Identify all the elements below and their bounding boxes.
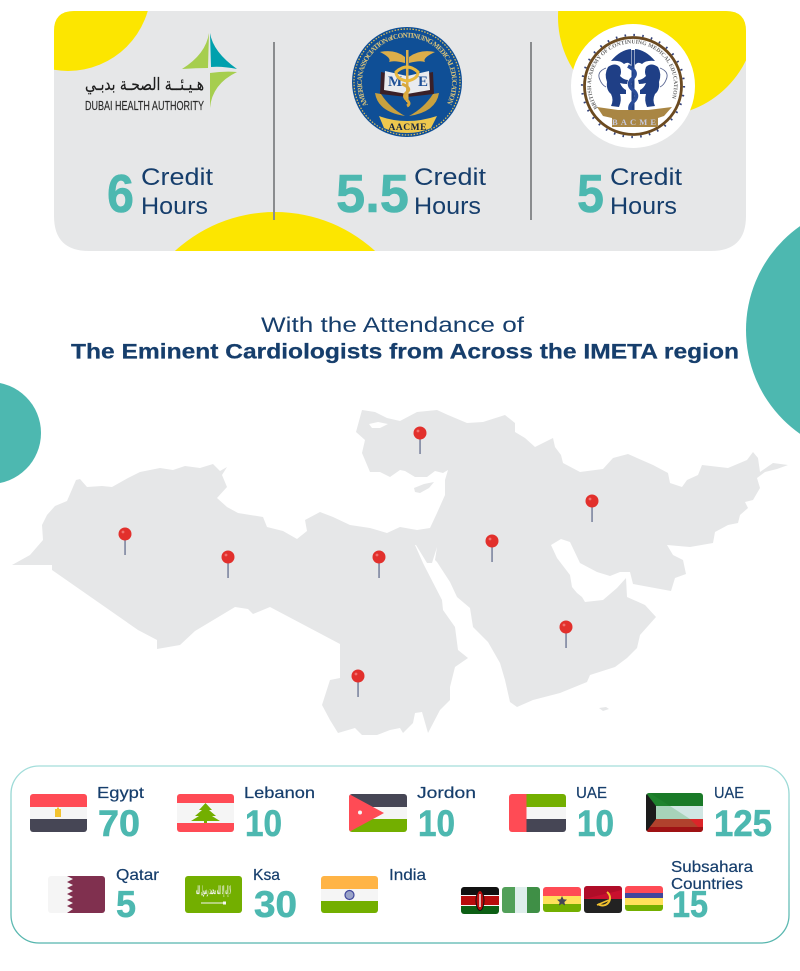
entry: KSA [185,867,297,925]
laurel [375,93,405,116]
heading: The Eminent Cardiologists from Across the IMETA region [71,340,739,364]
entry: Jordan: 10 [418,803,455,844]
caduceus [406,50,408,102]
map pin: South Arabia [560,620,572,648]
flag: UAE [509,794,566,832]
book [380,72,434,97]
entry: Subsahara Countries [461,860,754,918]
flag: Lebanon [177,794,234,832]
island: Socotra [599,707,609,711]
logo: AACME seal: AACME [388,123,426,133]
yellow accent shapes [54,11,746,251]
entry: KSA: 30 [254,884,297,925]
flag: Nigeria [502,887,540,913]
entry: Lebanon [177,786,314,836]
entry: UAE: UAE [576,785,607,802]
entry: UAE (Kuwait flag): 125 [714,803,772,844]
right lion [638,64,660,107]
credit: 5 hours: Credit [610,164,682,191]
map pin: North Arabia [486,534,498,562]
heading: With the Attendance of [261,313,524,337]
entry: India: India [389,867,426,884]
logo: Dubai Health Authority: هـيـئــة الصحـة بدبـي [85,75,204,95]
island: Cyprus [414,482,434,493]
entry: India [321,867,426,913]
decorative teal circle right [746,203,800,457]
logo: AACME seal: AMERICAN ASSOCIATION of CONTINUING MEDICAL EDUCATION [357,32,457,106]
flag: Kuwait [646,793,703,832]
wings [380,51,435,63]
credit: 5 hours: 5 [577,164,604,224]
entry: Lebanon: Lebanon [244,785,315,802]
credit: 5.5 hours: 5.5 [336,164,409,224]
map pin: Libya/Tunisia [222,550,234,578]
map pin: Turkey [414,426,426,454]
map pin: Iran [586,494,598,522]
logo: BACME seal: BACME [612,117,656,127]
entry: KSA: Ksa [253,867,280,884]
entry: UAE [509,786,613,836]
entry: Qatar: 5 [116,884,136,925]
logo: BACME seal: BRITISH ACADEMY OF CONTINUING MEDICAL EDUCATION [587,40,678,110]
entry: UAE (Kuwait flag): UAE [714,785,744,802]
map pin: Egypt [372,550,386,578]
entry: Subsahara Countries: Countries [671,876,743,893]
Marmara sea [369,422,388,428]
entry: Jordan: Jordon [417,785,476,802]
logo: Dubai Health Authority [85,33,237,113]
logo: Dubai Health Authority: DUBAI HEALTH AUTHORITY [85,98,204,113]
entry: Qatar [48,868,159,918]
entry: Egypt: Egypt [97,785,145,802]
map pin: Morocco/Algeria [118,528,132,555]
staff and snakes [632,50,634,122]
entry: Qatar: Qatar [116,867,160,884]
lion tails [599,68,667,87]
entry: Lebanon: 10 [245,803,282,844]
divider left [273,42,275,220]
entry: Egypt [30,786,144,836]
credit: 6 hours [107,164,213,224]
left lion [606,64,628,107]
panel: credit hours [54,11,746,251]
credit: 5.5 hours: Credit [414,164,486,191]
panel: attendance by country [11,766,789,943]
entry: KSA: لا إله إلا الله محمد رسول الله [196,884,231,897]
panel background [54,11,746,251]
flag: Qatar [48,876,105,913]
entry: Egypt: 70 [98,803,140,844]
flag: Angola [584,886,622,913]
map pin: Sudan [352,670,364,697]
flag: Mauritius [625,886,663,911]
wings [611,49,655,65]
credit: 5.5 hours: Hours [414,193,481,220]
entry: Subsahara Countries: 15 [672,884,708,925]
flag: Ghana [543,887,581,912]
credit: 6 hours: Credit [141,164,213,191]
credit: 5.5 hours [336,164,486,224]
heading [71,313,739,364]
logo: AACME seal: M [388,74,402,90]
credit: 6 hours: 6 [107,164,134,224]
flag: Jordan [349,794,407,832]
logo: BACME seal [571,24,695,148]
ribbon [379,116,437,133]
logo: AACME seal: E [418,74,428,90]
entry: Jordan [349,786,475,836]
credit: 5 hours: Hours [610,193,677,220]
logo: AACME seal [352,27,462,137]
flag: India [321,876,378,913]
decorative teal circle left [0,382,41,484]
entry: UAE: 10 [577,803,614,844]
divider right [530,42,532,220]
credit: 5 hours [577,164,682,224]
flag: Kenya [461,887,499,914]
entry: Subsahara Countries: Subsahara [671,859,753,876]
map of IMETA region [12,410,788,735]
credit: 6 hours: Hours [141,193,208,220]
ribbon [597,107,672,127]
flag: Egypt [30,794,87,832]
entry: UAE (Kuwait flag) [646,786,772,836]
